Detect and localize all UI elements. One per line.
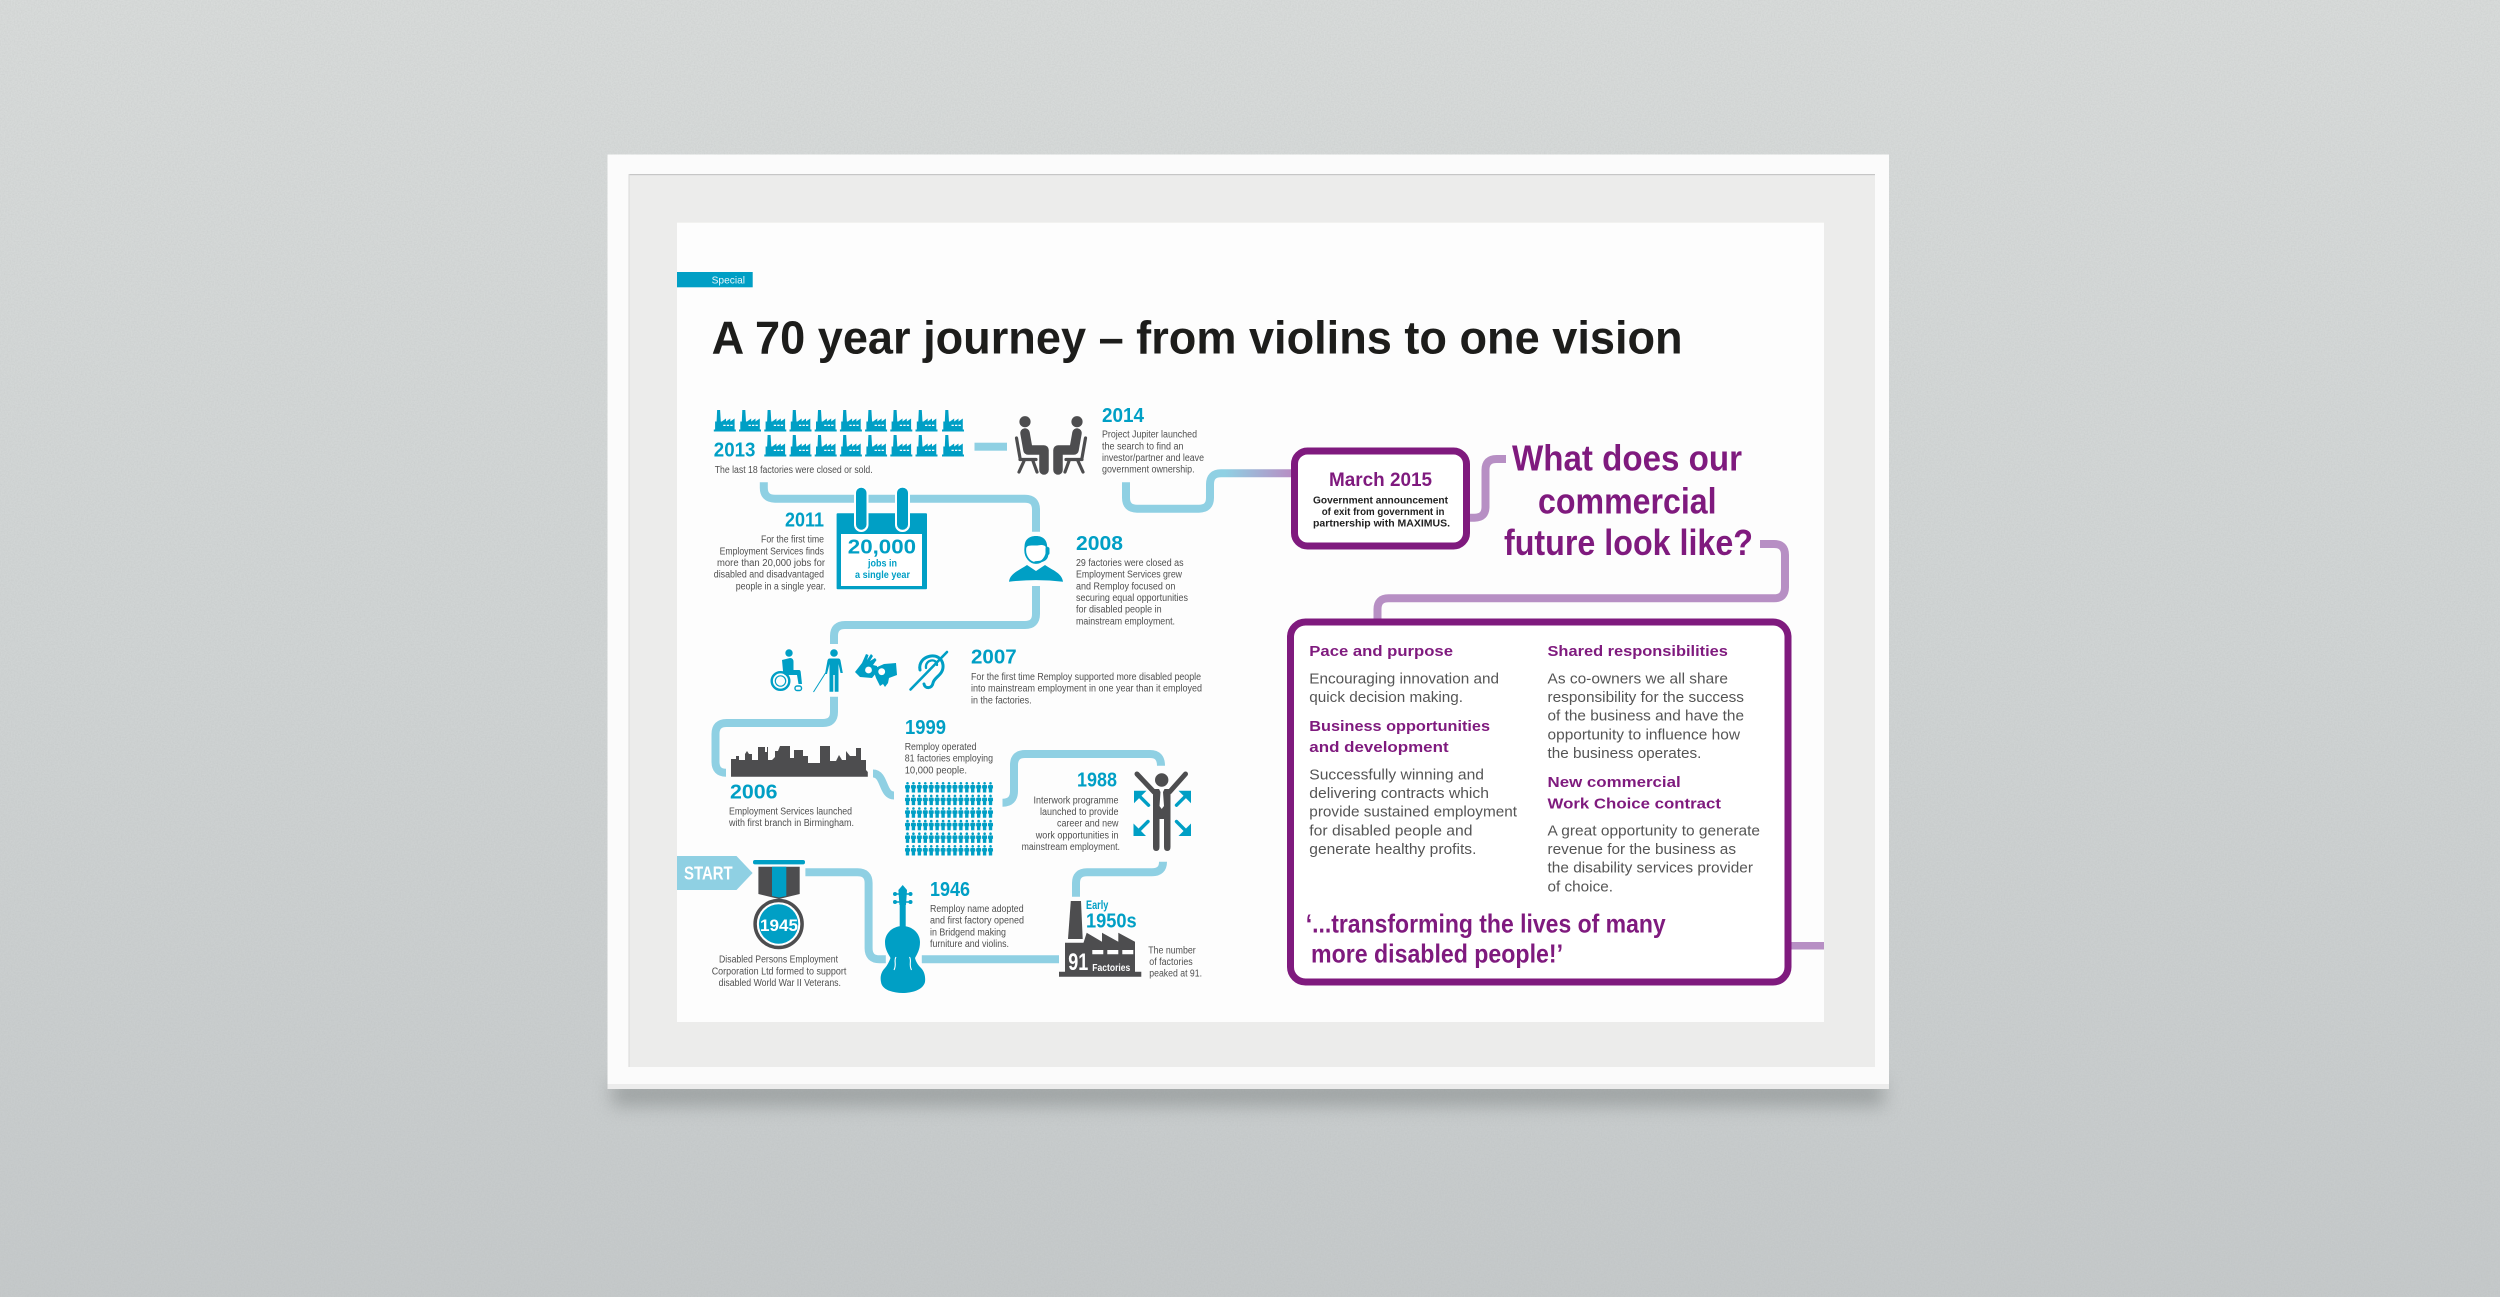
milestone: 2007: into mainstream employment in one year than it employed bbox=[971, 684, 1202, 695]
milestone: 1988: launched to provide bbox=[1040, 807, 1119, 818]
milestone: 2013: The last 18 factories were closed or sold. bbox=[715, 465, 873, 476]
text block: pace and purpose: Encouraging innovation and bbox=[1309, 670, 1499, 687]
text block: shared responsibilities: of the business and have the bbox=[1548, 708, 1744, 725]
milestone: 2007 bbox=[971, 646, 1202, 706]
icon: sign language hands bbox=[855, 654, 897, 687]
milestone: 2014: the search to find an bbox=[1102, 441, 1184, 452]
start arrow: START bbox=[684, 863, 733, 883]
milestone: 1945 description bbox=[712, 955, 847, 989]
milestone: 1946: 1946 bbox=[930, 879, 970, 901]
milestone: 1988: 1988 bbox=[1077, 770, 1117, 792]
milestone: 1946: and first factory opened bbox=[930, 916, 1024, 927]
text block: shared responsibilities bbox=[1548, 643, 1744, 762]
text block: business opportunities: provide sustained employment bbox=[1309, 804, 1518, 821]
milestone: 2007: in the factories. bbox=[971, 695, 1032, 706]
route line: 1946 to 1950s bbox=[922, 955, 1059, 963]
picture frame bbox=[608, 154, 1889, 1089]
callout: March 2015: March 2015 bbox=[1329, 469, 1432, 491]
milestone: 2006: 2006 bbox=[730, 781, 778, 803]
icon: Birmingham skyline bbox=[731, 746, 868, 777]
route line: 1999 to 1988 bbox=[1002, 754, 1161, 803]
route line: 2007 to 2006 bbox=[716, 697, 834, 773]
route line: 1945 to 1946 bbox=[805, 872, 886, 959]
milestone: 2006: Employment Services launched bbox=[729, 806, 852, 817]
icon: hearing loop ear bbox=[910, 652, 947, 690]
milestone: early 1950s: of factories bbox=[1149, 957, 1193, 968]
icon: person with cane bbox=[814, 649, 843, 692]
milestone: 1988: mainstream employment. bbox=[1022, 842, 1120, 853]
poster sheet bbox=[677, 223, 1824, 1022]
milestone: early 1950s bbox=[1086, 900, 1202, 980]
milestone: 2014 bbox=[1102, 405, 1204, 476]
section tag: Special bbox=[677, 272, 753, 287]
heading: question: commercial bbox=[1538, 480, 1717, 521]
milestone: early 1950s: 1950s bbox=[1086, 910, 1137, 932]
milestone: 2014: government ownership. bbox=[1102, 465, 1195, 476]
milestone: 1945 description: disabled World War II Veterans. bbox=[719, 978, 841, 989]
milestone: 1988: Interwork programme bbox=[1034, 795, 1119, 806]
milestone: 2008: Employment Services grew bbox=[1076, 570, 1183, 581]
milestone: 1946: furniture and violins. bbox=[930, 939, 1009, 950]
panel: timeline route bbox=[716, 443, 1824, 959]
text block: shared responsibilities: responsibility for the success bbox=[1548, 689, 1744, 706]
milestone: 2011: disabled and disadvantaged bbox=[714, 570, 824, 581]
text block: business opportunities bbox=[1309, 718, 1518, 858]
milestone: 2008: 29 factories were closed as bbox=[1076, 558, 1184, 569]
heading: question: future look like? bbox=[1504, 522, 1753, 563]
text block: work choice contract bbox=[1548, 774, 1760, 895]
start arrow bbox=[677, 856, 753, 890]
text block: business opportunities: Business opportunities bbox=[1309, 718, 1490, 735]
milestone: early 1950s: Early bbox=[1086, 900, 1109, 912]
milestone: 2014: 2014 bbox=[1102, 405, 1145, 427]
icon: wheelchair user bbox=[772, 649, 802, 690]
milestone: 2011: 2011 bbox=[785, 510, 824, 532]
icon: factory with 91 factories bbox=[1059, 901, 1141, 977]
icon: medal 1945: 1945 bbox=[760, 916, 798, 935]
text block: pace and purpose bbox=[1309, 643, 1499, 706]
milestone: 2008 bbox=[1076, 533, 1188, 627]
milestone: early 1950s: The number bbox=[1148, 945, 1196, 956]
milestone: 1988 bbox=[1022, 770, 1120, 853]
milestone: 1988: career and new bbox=[1057, 819, 1119, 830]
milestone: 1945 description: Disabled Persons Employment bbox=[719, 955, 838, 966]
milestone: 2006 bbox=[728, 781, 854, 829]
icon: two people seated bbox=[1016, 416, 1086, 472]
section tag: Special: Special bbox=[712, 274, 745, 286]
milestone: 1999: Remploy operated bbox=[905, 742, 976, 753]
milestone: 1988: work opportunities in bbox=[1035, 830, 1118, 841]
milestone: 2008: 2008 bbox=[1076, 533, 1123, 555]
route line: 2006 to 1999 bbox=[873, 774, 894, 796]
text block: business opportunities: generate healthy profits. bbox=[1309, 841, 1476, 858]
route line: March 2015 to question bbox=[1470, 459, 1506, 518]
milestone: 2014: Project Jupiter launched bbox=[1102, 430, 1197, 441]
milestone: 2007: 2007 bbox=[971, 646, 1017, 668]
icon: man with expanding arrows bbox=[1134, 773, 1191, 851]
milestone: 2007: For the first time Remploy supported more disabled people bbox=[971, 672, 1201, 683]
text block: pace and purpose: Pace and purpose bbox=[1309, 643, 1453, 660]
milestone: 1946: Remploy name adopted bbox=[930, 904, 1024, 915]
text block: work choice contract: the disability services provider bbox=[1548, 860, 1753, 877]
icon: calendar 20,000 jobs: jobs in bbox=[867, 558, 897, 570]
text block: business opportunities: and development bbox=[1309, 739, 1449, 756]
milestone: 2011: For the first time bbox=[761, 535, 824, 546]
milestone: 2013: 2013 bbox=[714, 440, 755, 462]
quote: more disabled people!’ bbox=[1311, 938, 1563, 968]
route line: question to benefits box bbox=[1378, 544, 1785, 619]
text block: work choice contract: New commercial bbox=[1548, 774, 1681, 791]
milestone: 1946 bbox=[930, 879, 1024, 950]
text block: business opportunities: delivering contracts which bbox=[1309, 785, 1489, 802]
route line: 2008 to 2007 bbox=[834, 586, 1036, 644]
icon: calendar 20,000 jobs: a single year bbox=[855, 569, 910, 581]
icon: headset operator bbox=[1009, 536, 1063, 582]
milestone: 2011: Employment Services finds bbox=[720, 546, 824, 557]
text block: work choice contract: of choice. bbox=[1548, 878, 1613, 895]
title: A 70 year journey – from violins to one vision bbox=[712, 311, 1683, 363]
heading: question bbox=[1504, 438, 1753, 563]
heading: question: What does our bbox=[1512, 438, 1742, 479]
text block: business opportunities: for disabled people and bbox=[1309, 822, 1472, 839]
icon: factory with 91 factories: Factories bbox=[1092, 963, 1131, 974]
text block: business opportunities: Successfully winning and bbox=[1309, 766, 1484, 783]
callout: March 2015: partnership with MAXIMUS. bbox=[1313, 519, 1450, 530]
text block: shared responsibilities: Shared responsibilities bbox=[1548, 643, 1728, 660]
frame shadow bbox=[612, 1080, 1884, 1106]
milestone: 1946: in Bridgend making bbox=[930, 927, 1006, 938]
icon: calendar 20,000 jobs: 20,000 bbox=[848, 536, 916, 558]
milestone: 2011 bbox=[714, 510, 826, 592]
text block: shared responsibilities: opportunity to influence how bbox=[1548, 726, 1740, 743]
milestone: 2008: mainstream employment. bbox=[1076, 616, 1175, 627]
route line: 2013 to 2008 bbox=[764, 482, 1036, 532]
milestone: 1999 bbox=[905, 717, 993, 776]
icon: violin bbox=[881, 885, 925, 993]
milestone: 1999: 10,000 people. bbox=[905, 765, 967, 776]
milestone: 2013 bbox=[714, 440, 873, 476]
text block: work choice contract: revenue for the business as bbox=[1548, 841, 1736, 858]
milestone: 1999: 81 factories employing bbox=[905, 754, 993, 765]
quote: ‘...transforming the lives of many bbox=[1306, 909, 1666, 939]
text block: work choice contract: Work Choice contract bbox=[1548, 795, 1721, 812]
milestone: 2008: securing equal opportunities bbox=[1076, 593, 1188, 604]
milestone: 2008: for disabled people in bbox=[1076, 605, 1162, 616]
icon: factory with 91 factories: 91 bbox=[1068, 949, 1088, 976]
icon: calendar 20,000 jobs bbox=[837, 486, 927, 589]
route line: 2013 to 2014 bbox=[974, 443, 1007, 451]
icon: 18 factories bbox=[714, 410, 964, 456]
milestone: 2006: with first branch in Birmingham. bbox=[728, 818, 854, 829]
route line: exit to right edge bbox=[1791, 942, 1824, 950]
panel: commercial future bbox=[1290, 622, 1788, 982]
milestone: 2008: and Remploy focused on bbox=[1076, 581, 1175, 592]
text block: shared responsibilities: As co-owners we all share bbox=[1548, 670, 1728, 687]
milestone: early 1950s: peaked at 91. bbox=[1149, 969, 1202, 980]
milestone: 2011: more than 20,000 jobs for bbox=[717, 558, 826, 569]
pictogram: grid of people bbox=[905, 782, 993, 856]
quote bbox=[1306, 909, 1666, 968]
route line: 1988 to 1950s bbox=[1076, 862, 1163, 897]
icon: medal 1945 bbox=[753, 860, 805, 948]
callout: March 2015: of exit from government in bbox=[1322, 507, 1444, 518]
text block: shared responsibilities: the business operates. bbox=[1548, 745, 1701, 762]
text block: pace and purpose: quick decision making. bbox=[1309, 689, 1463, 706]
milestone: 1945 description: Corporation Ltd formed to support bbox=[712, 966, 847, 977]
milestone: 1999: 1999 bbox=[905, 717, 946, 739]
callout: March 2015: Government announcement bbox=[1313, 495, 1449, 506]
callout: March 2015 bbox=[1294, 451, 1466, 546]
milestone: 2011: people in a single year. bbox=[736, 581, 826, 592]
milestone: 2014: investor/partner and leave bbox=[1102, 453, 1204, 464]
route line: 2014 to March 2015 bbox=[1126, 473, 1291, 509]
text block: work choice contract: A great opportunity to generate bbox=[1548, 822, 1760, 839]
